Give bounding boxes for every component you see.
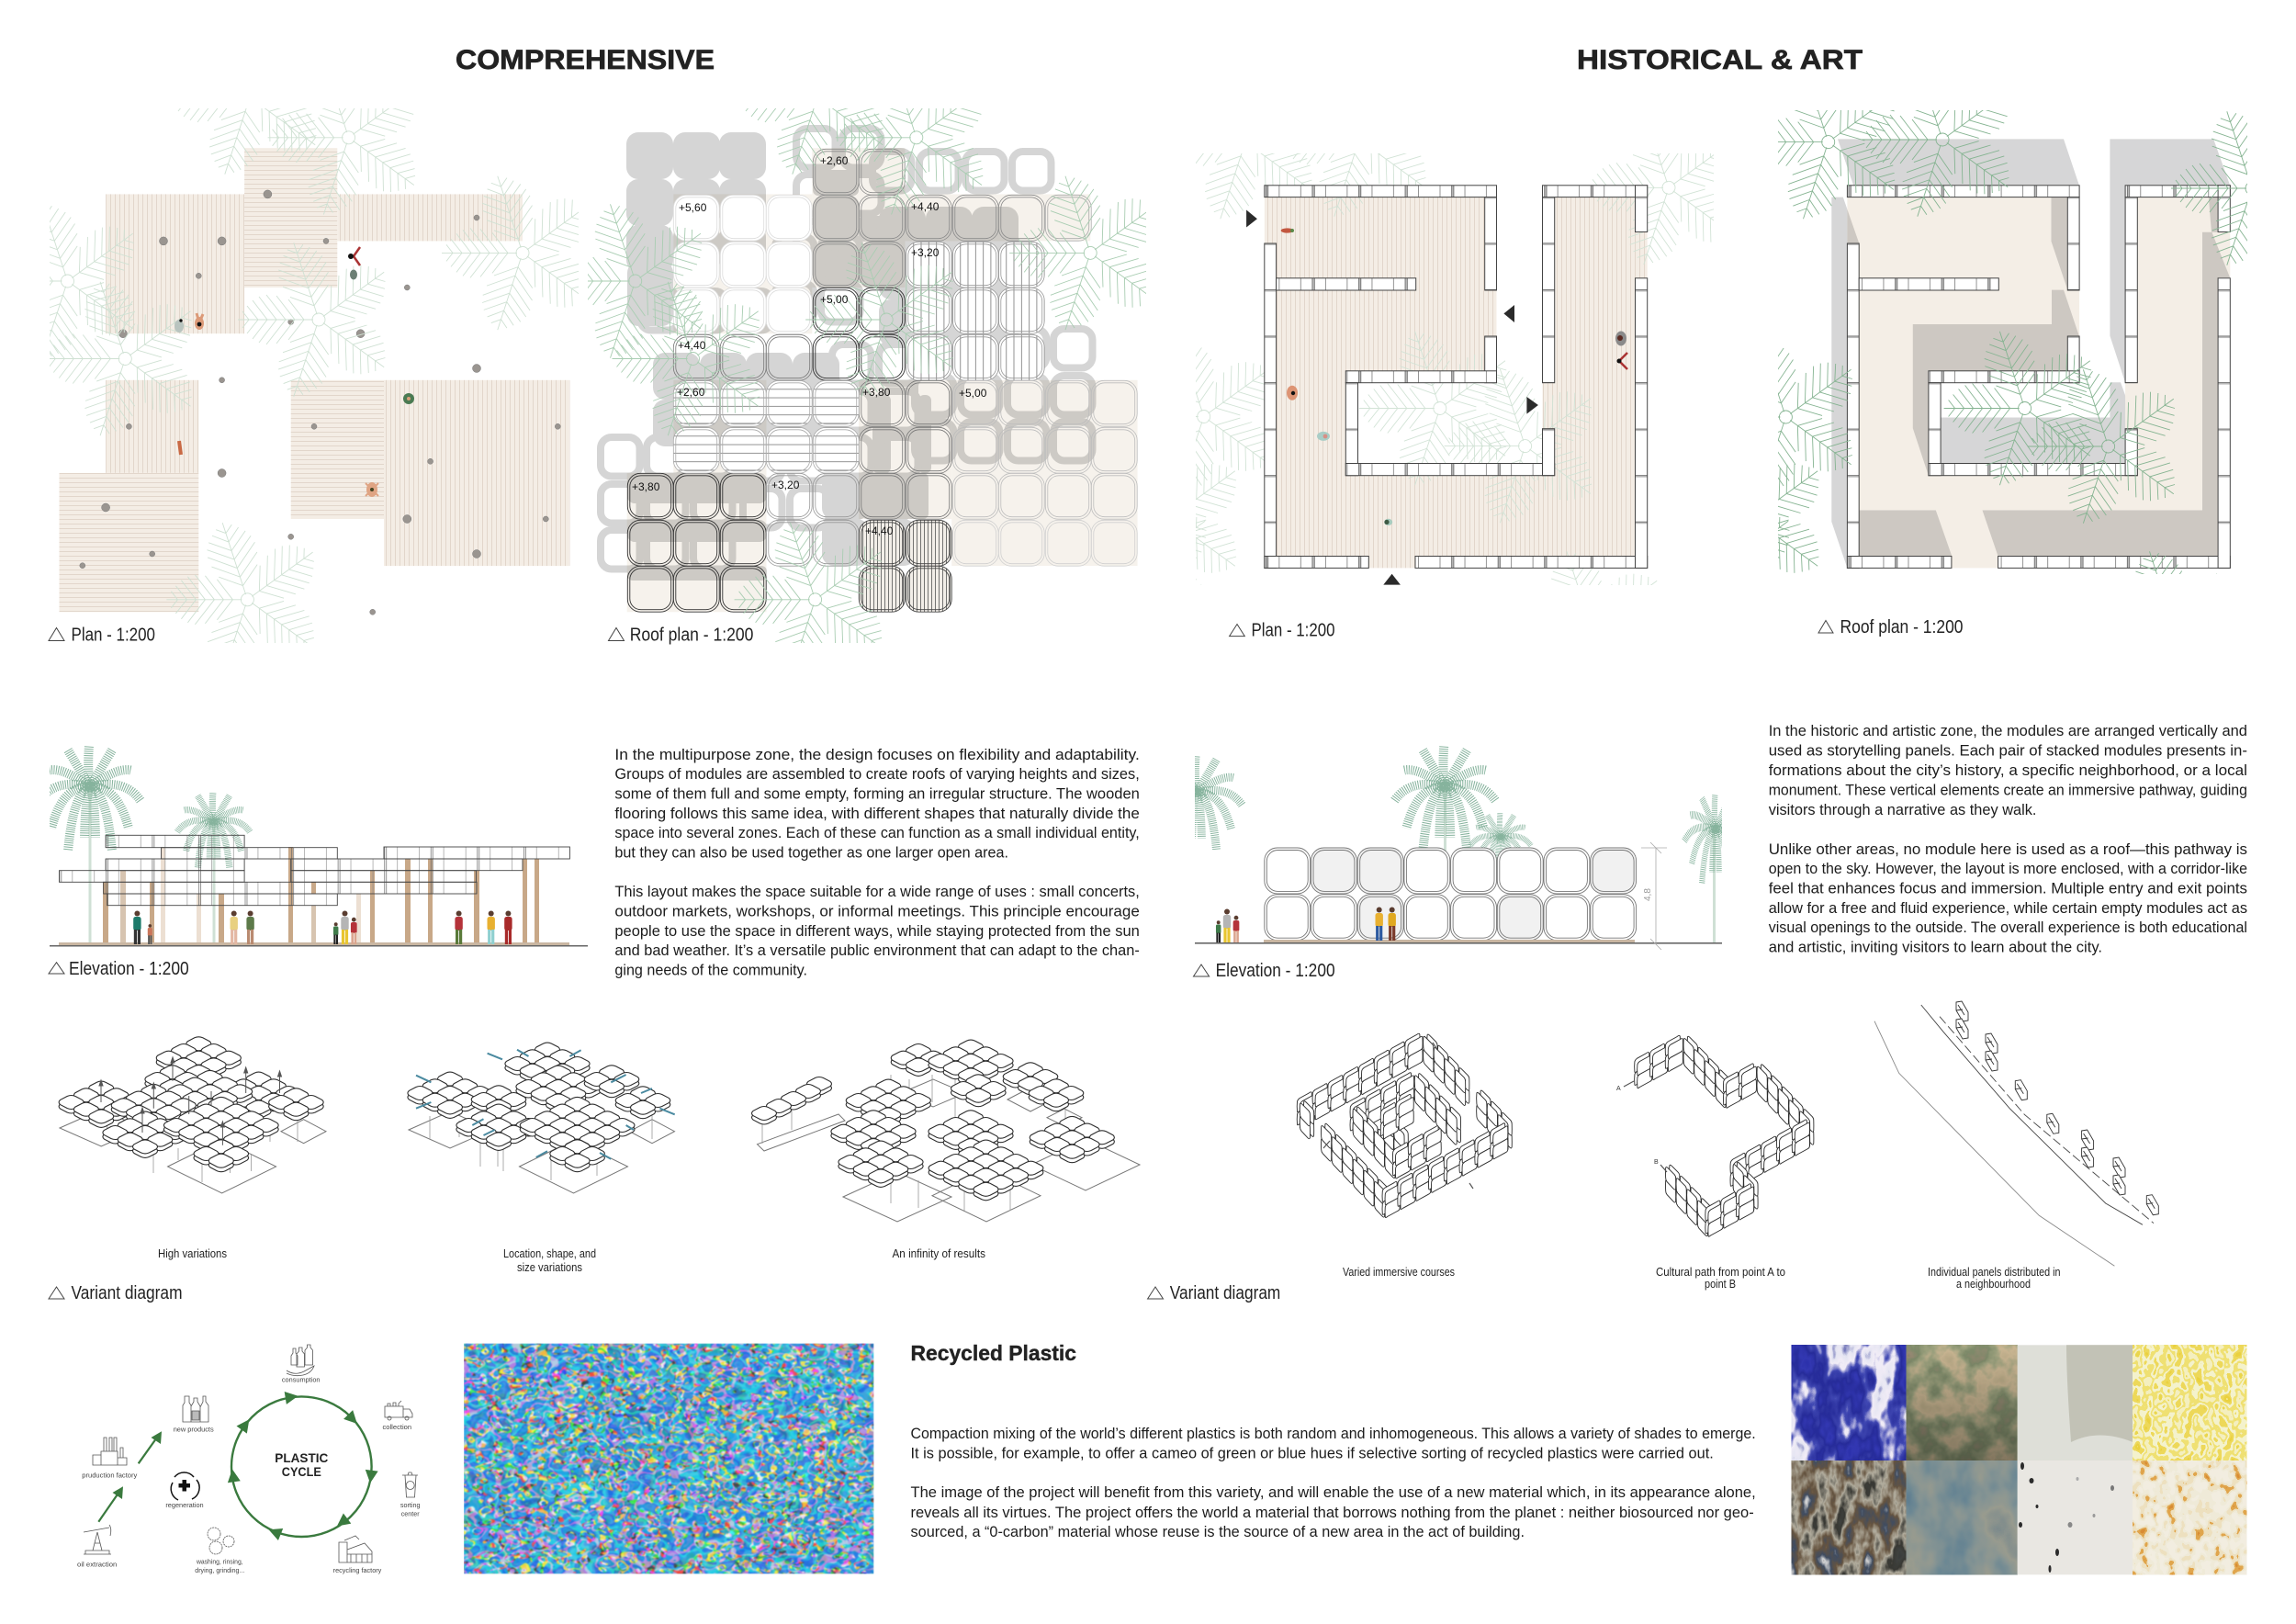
- text block: multipurpose zone: This layout makes the space suitable for a wide range of uses : small concerts,: [614, 883, 1140, 900]
- diagram: high variations: [59, 1037, 326, 1193]
- roof modules: [627, 149, 1137, 612]
- icon: people in elevation: [1216, 908, 1396, 942]
- chart: plastic cycle: CYCLE: [282, 1464, 321, 1479]
- text block: multipurpose zone: but they can also be used together as one larger open area.: [614, 843, 1008, 862]
- text block: historic zone: visual openings to the outside. The overall experience is both educational: [1769, 919, 2247, 936]
- icon: gears: [208, 1528, 234, 1554]
- cycle labels: sorting: [400, 1501, 421, 1509]
- icon: sorting bin: [402, 1472, 418, 1497]
- cycle labels: [77, 1376, 421, 1574]
- stacked modules: [1265, 848, 1637, 941]
- text block: recycled plastic: It is possible, for example, to offer a cameo of green or blue hues if selective sorting of recycled plastics were carried out.: [911, 1444, 1714, 1462]
- caption: cultural path: [1656, 1266, 1785, 1291]
- cycle labels: drying, grinding...: [195, 1566, 244, 1574]
- text block: historic zone: Unlike other areas, no module here is used as a roof—this pathway is: [1769, 840, 2247, 858]
- cycle labels: regeneration: [165, 1501, 204, 1509]
- title: historical and art: HISTORICAL & ART: [1577, 45, 1863, 75]
- text block: multipurpose zone: Groups of modules are assembled to create roofs of varying heights and sizes,: [614, 765, 1140, 783]
- diagram: cultural path: B: [1654, 1159, 1659, 1166]
- roof height labels: +4,40: [678, 339, 706, 352]
- text block: multipurpose zone: some of them full and some empty, forming an irregular structure. The wooden: [614, 784, 1140, 803]
- text block: historic zone: monument. These vertical elements create an immersive pathway, guiding: [1769, 781, 2247, 799]
- cycle labels: consumption: [282, 1376, 321, 1383]
- cycle labels: pruduction factory: [82, 1471, 137, 1479]
- ground: [59, 942, 569, 946]
- text block: historic zone: formations about the city’s history, a specific neighborhood, or a local: [1769, 761, 2247, 779]
- caption: individual panels: [1928, 1266, 2061, 1291]
- icon: collection truck: [385, 1401, 412, 1420]
- cycle labels: recycling factory: [333, 1566, 382, 1574]
- title: comprehensive: COMPREHENSIVE: [456, 45, 715, 75]
- text block: historic zone: used as storytelling panels. Each pair of stacked modules presents in-: [1769, 742, 2247, 759]
- diagram: varied immersive courses: [1297, 1033, 1512, 1218]
- text block: historic zone: visitors through a narrative as they walk.: [1769, 801, 2037, 818]
- icon: palms on historical roof plan: [1778, 110, 2247, 574]
- roof height labels: +2,60: [677, 386, 705, 399]
- label: historical plan 1:200: [1230, 621, 1335, 641]
- caption: individual panels: a neighbourhood: [1956, 1278, 2031, 1291]
- diagram: individual panels in a neighbourhood: [1874, 1001, 2158, 1266]
- roof height labels: +3,20: [911, 246, 940, 259]
- cycle labels: oil extraction: [77, 1560, 117, 1568]
- icon: consumption: [287, 1345, 314, 1376]
- heading: recycled plastic: Recycled Plastic: [911, 1341, 1076, 1365]
- text block: recycled plastic: The image of the project will benefit from this variety, and will enable the use of a new material which, in its appearance alone,: [911, 1483, 1756, 1501]
- cycle labels: collection: [382, 1423, 411, 1431]
- icon: palm trees in elevation: [39, 746, 250, 944]
- roof height labels: +3,80: [632, 480, 660, 493]
- label: roof plan 1:200: Roof plan - 1:200: [630, 625, 753, 645]
- panel: comprehensive elevation: [39, 746, 588, 946]
- caption: cultural path: Cultural path from point A to: [1656, 1266, 1785, 1279]
- chart: plastic cycle: PLASTIC: [275, 1450, 328, 1465]
- panel: comprehensive plan: [50, 108, 579, 643]
- image: recycled plastic photo: [464, 1344, 873, 1573]
- icon: palm trees in elevation: [1195, 746, 1722, 942]
- text block: multipurpose zone: [614, 746, 1140, 979]
- panel: historical plan: [1059, 55, 1749, 713]
- label: elevation 1:200 left: Elevation - 1:200: [69, 959, 189, 979]
- dimension line: [1641, 842, 1667, 950]
- icon: people on historical plan: [1281, 228, 1627, 525]
- roof height labels: +3,80: [862, 386, 891, 399]
- caption: location, shape and size: size variations: [517, 1261, 582, 1274]
- diagram: cultural path: [1616, 1035, 1814, 1236]
- roof slabs: [59, 835, 569, 906]
- icon: oil extraction: [84, 1525, 111, 1554]
- roof height labels: +4,40: [865, 524, 894, 537]
- text block: historic zone: allow for a free and fluid experience, while certain empty modules act as: [1769, 899, 2247, 917]
- roof shadows: [601, 129, 1093, 581]
- caption: individual panels: Individual panels distributed in: [1928, 1266, 2061, 1279]
- caption: high variations: High variations: [158, 1247, 227, 1260]
- roof height labels: +5,00: [959, 387, 987, 400]
- text block: multipurpose zone: In the multipurpose zone, the design focuses on flexibility and adaptability.: [614, 746, 1140, 763]
- ground: [1264, 940, 1635, 942]
- label: plan 1:200: Plan - 1:200: [72, 625, 155, 645]
- icon: palms on plan: [50, 108, 579, 643]
- icon: production factory: [93, 1438, 127, 1465]
- label: variant diagram left: Variant diagram: [72, 1283, 182, 1303]
- text block: historic zone: [1769, 722, 2247, 955]
- text block: multipurpose zone: ging needs of the community.: [614, 961, 807, 979]
- cycle labels: washing, rinsing,: [196, 1558, 243, 1566]
- straight arrows: [98, 1431, 162, 1522]
- panel: historical elevation: [1195, 746, 1722, 950]
- icon: new products: [183, 1396, 208, 1422]
- label: elevation 1:200 right: Elevation - 1:200: [1216, 961, 1335, 981]
- roof height labels: +5,00: [820, 293, 849, 306]
- diagram: an infinity of results: [751, 1040, 1140, 1222]
- label: variant diagram right: Variant diagram: [1170, 1283, 1280, 1303]
- text block: recycled plastic: [911, 1425, 1756, 1540]
- diagram: location, shape and size variations: [408, 1043, 675, 1193]
- text block: multipurpose zone: flooring follows this same idea, with different shapes that naturally divide the: [614, 805, 1140, 822]
- text block: multipurpose zone: and bad weather. It’s a versatile public environment that can adapt to the chan-: [614, 942, 1140, 959]
- text block: historic zone: and artistic, inviting visitors to learn about the city.: [1769, 939, 2102, 955]
- roof height labels: +3,20: [771, 479, 800, 491]
- text block: historic zone: In the historic and artistic zone, the modules are arranged vertically and: [1769, 722, 2247, 739]
- text block: historic zone: feel that enhances focus and immersion. Multiple entry and exit points: [1769, 880, 2247, 897]
- text block: multipurpose zone: people to use the space in different ways, while staying protected from the sun: [614, 922, 1140, 940]
- columns: [103, 847, 539, 944]
- panel: comprehensive roof plan: [555, 13, 1170, 684]
- cycle labels: center: [401, 1509, 420, 1517]
- image: material samples grid: [1792, 1345, 2246, 1574]
- label: historical roof plan 1:200: Roof plan - 1:200: [1840, 617, 1964, 637]
- text block: historic zone: open to the sky. However, the layout is more enclosed, with a corridor-like: [1769, 860, 2247, 877]
- cycle labels: new products: [174, 1426, 214, 1434]
- label: plan 1:200: [49, 625, 155, 645]
- caption: location, shape and size: [503, 1247, 596, 1274]
- roof height labels: +4,40: [911, 200, 940, 213]
- icon: regeneration: [171, 1472, 199, 1500]
- roof height labels: [632, 154, 987, 537]
- panel: historical roof plan: [1778, 110, 2247, 574]
- text block: multipurpose zone: outdoor markets, workshops, or informal meetings. This principle encourage: [614, 902, 1140, 920]
- icon: people on plan: [174, 247, 414, 497]
- caption: varied immersive courses: Varied immersive courses: [1343, 1266, 1455, 1279]
- diagram: cultural path: A: [1616, 1086, 1621, 1092]
- caption: infinity of results: An infinity of results: [893, 1247, 985, 1260]
- label: historical plan 1:200: Plan - 1:200: [1251, 621, 1335, 641]
- roof height labels: +5,60: [679, 201, 707, 214]
- icon: palms on roof plan: [555, 13, 1170, 684]
- icon: palms on historical plan: [1059, 55, 1749, 713]
- icon: people in elevation: [133, 911, 512, 944]
- icon: recycling factory: [339, 1536, 372, 1562]
- text block: recycled plastic: sourced, a “0-carbon” material whose reuse is the source of a new area in the act of building.: [911, 1523, 1525, 1540]
- chart: plastic cycle: [77, 1345, 421, 1574]
- circle arrowheads: [226, 1390, 378, 1540]
- icon: entry arrows: [1246, 209, 1538, 585]
- caption: location, shape and size: Location, shape, and: [503, 1247, 596, 1260]
- text block: recycled plastic: Compaction mixing of the world’s different plastics is both random and inhomogeneous. This allows a variety of shades to emerge.: [911, 1425, 1756, 1442]
- text block: recycled plastic: reveals all its virtues. The project offers the world a material that borrows nothing from the planet : neither biosourced nor geo-: [911, 1504, 1754, 1521]
- panel: historical elevation: 4,8: [1643, 888, 1653, 901]
- text block: multipurpose zone: space into several zones. Each of these can function as a small individual entity,: [614, 824, 1140, 841]
- roof height labels: +2,60: [820, 154, 849, 167]
- caption: cultural path: point B: [1705, 1278, 1736, 1291]
